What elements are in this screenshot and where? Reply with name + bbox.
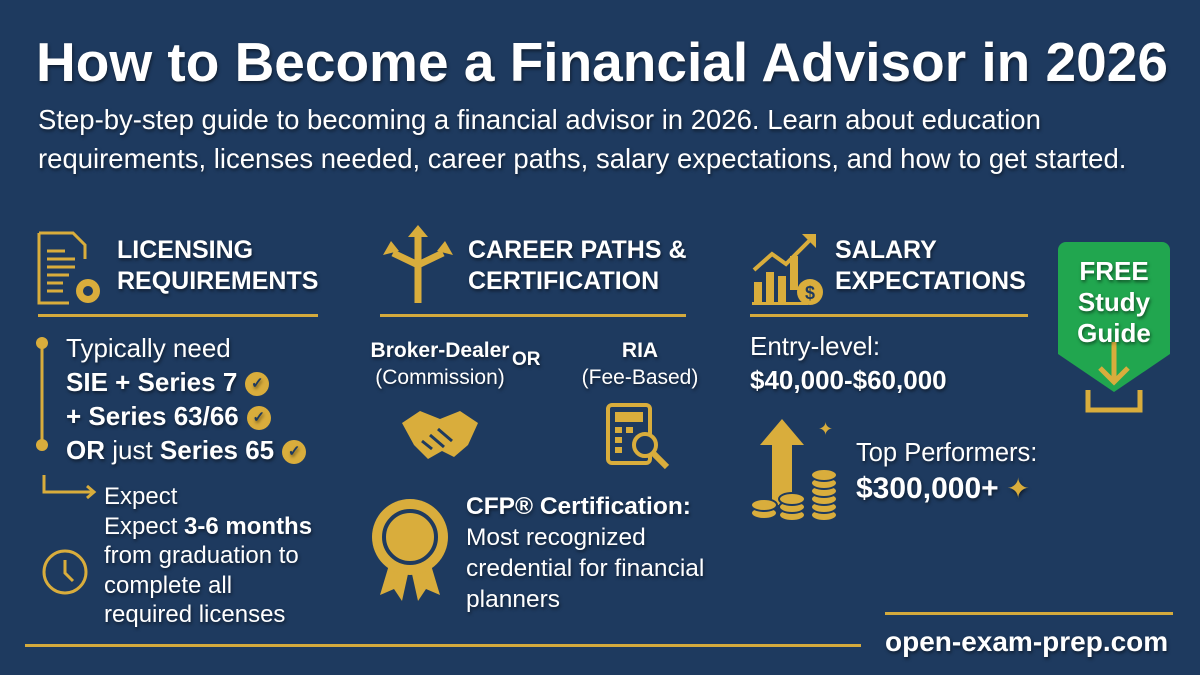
entry-level: Entry-level: xyxy=(750,331,880,361)
callout: free study guide: Guide xyxy=(1077,318,1151,348)
panel: licensing xyxy=(36,232,320,630)
requirements text: ✓ xyxy=(251,375,264,392)
panel: career paths xyxy=(371,225,705,614)
timing text: complete all xyxy=(104,572,232,598)
panel: salary xyxy=(750,234,1037,520)
timing text: from graduation to xyxy=(104,542,299,569)
heading: SALARY xyxy=(835,236,937,264)
CFP text: planners xyxy=(466,586,560,613)
icon: growth chart: $ xyxy=(805,283,815,303)
icon: handshake xyxy=(402,411,478,459)
requirements text: + Series 63/66 xyxy=(66,401,239,431)
icon: split arrows xyxy=(383,225,453,303)
timing text: Expect 3-6 months xyxy=(104,512,312,540)
timing text: Expect xyxy=(104,483,177,510)
heading xyxy=(835,236,1027,295)
heading: CERTIFICATION xyxy=(468,267,659,295)
RIA xyxy=(582,339,700,391)
subtitle: Step-by-step guide to becoming a financial advisor in 2026. Learn about education requirements, licenses needed, career paths, salary expectations, and how to get started. xyxy=(38,104,1126,174)
RIA: (Fee-Based) xyxy=(582,366,698,389)
icon: calculator xyxy=(606,403,670,470)
CFP text: CFP® Certification: xyxy=(466,493,691,520)
icon: coins and arrow: ✦ xyxy=(818,419,833,439)
CFP text xyxy=(466,493,705,614)
top performers xyxy=(856,439,1037,506)
requirements text: Typically need xyxy=(66,333,231,363)
icon: growth chart xyxy=(752,234,823,305)
callout: free study guide xyxy=(1058,242,1170,412)
broker-dealer xyxy=(371,339,511,391)
entry-level xyxy=(750,331,948,396)
callout: free study guide: FREE xyxy=(1079,256,1149,286)
icon: document gear xyxy=(38,232,100,304)
heading: REQUIREMENTS xyxy=(117,267,318,295)
heading xyxy=(117,236,320,297)
heading: LICENSING xyxy=(117,236,253,264)
broker-dealer: (Commission) xyxy=(375,366,505,389)
title: How to Become a Financial Advisor in 2026 xyxy=(36,31,1168,93)
top performers: Top Performers: xyxy=(856,439,1037,467)
timeline xyxy=(36,337,96,499)
requirements text: ✓ xyxy=(252,409,265,426)
requirements text: OR just Series 65 xyxy=(66,435,274,465)
requirements text: SIE + Series 7 xyxy=(66,367,237,397)
icon: clock xyxy=(42,550,88,594)
broker-dealer: Broker-Dealer xyxy=(371,339,509,362)
RIA: RIA xyxy=(622,339,658,362)
heading: EXPECTATIONS xyxy=(835,267,1026,295)
requirements text: ✓ xyxy=(288,443,300,460)
CFP text: credential for financial xyxy=(466,555,704,582)
heading xyxy=(468,236,688,295)
footer url: open-exam-prep.com xyxy=(885,626,1168,657)
icon: award ribbon xyxy=(372,499,448,601)
top performers: $300,000+ ✦ xyxy=(856,472,1030,505)
timing text xyxy=(104,483,314,630)
heading: CAREER PATHS & xyxy=(468,236,687,264)
requirements text xyxy=(66,333,306,468)
CFP text: Most recognized xyxy=(466,524,646,551)
entry-level: $40,000-$60,000 xyxy=(750,365,947,395)
OR: OR xyxy=(512,349,540,370)
icon: coins and arrow xyxy=(752,419,836,520)
timing text: required licenses xyxy=(104,601,285,628)
callout: free study guide: Study xyxy=(1078,287,1150,317)
